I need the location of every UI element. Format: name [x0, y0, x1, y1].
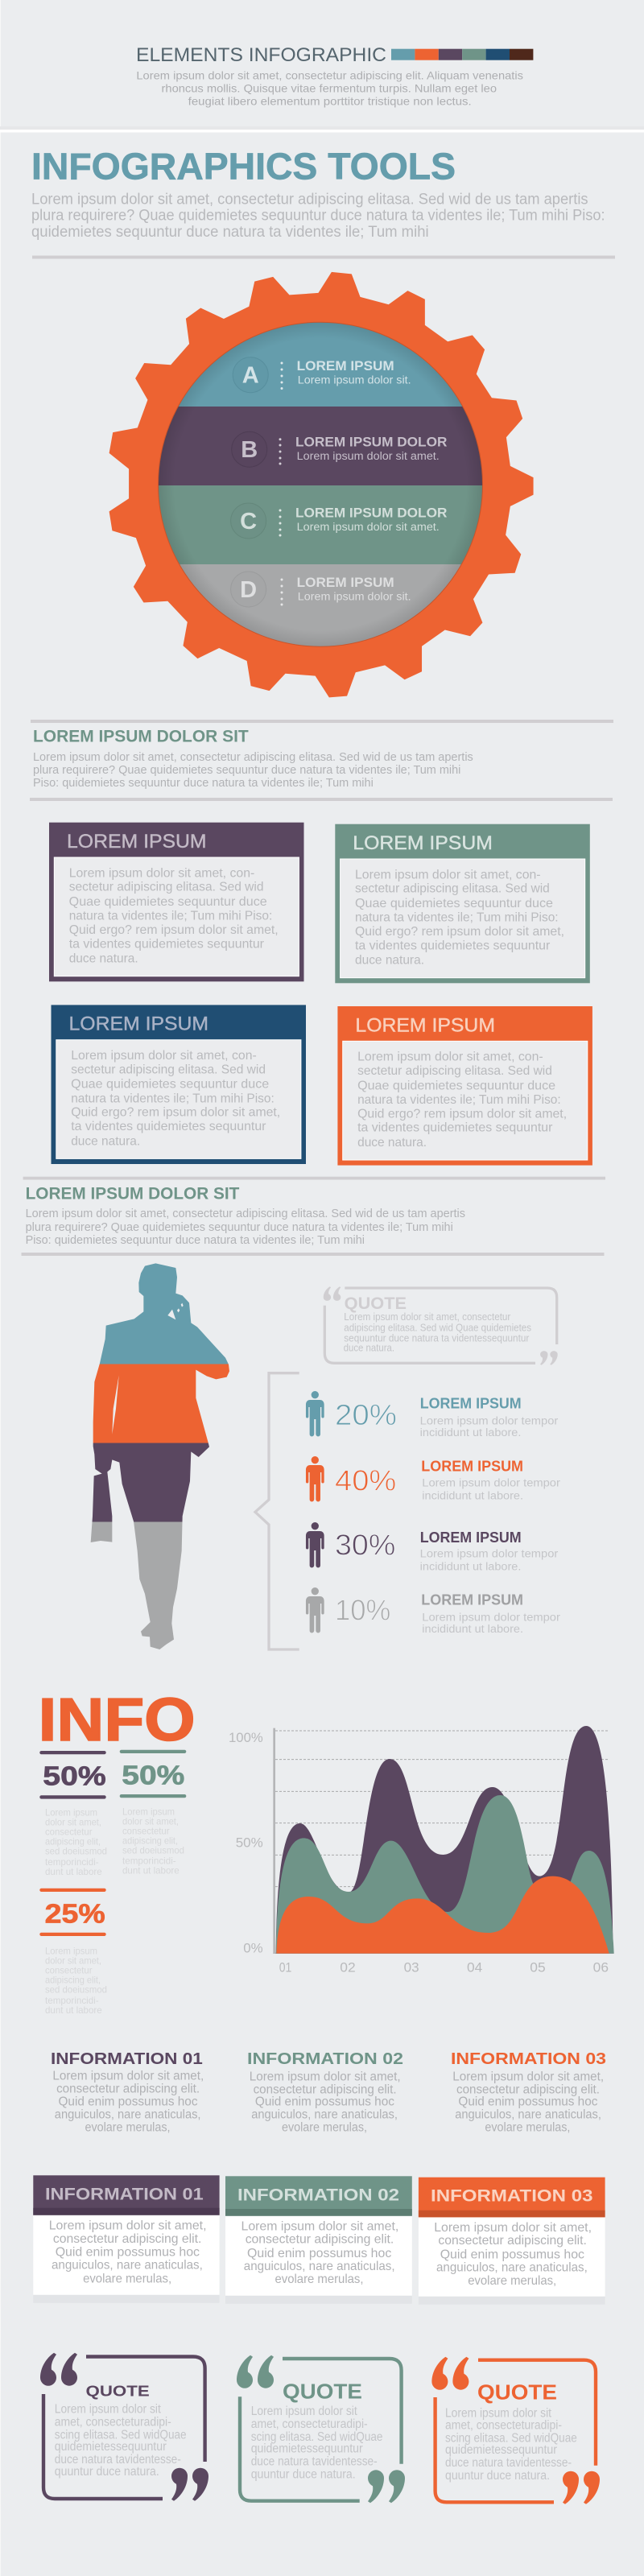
- stat 50% purple: consectetur: [45, 1827, 92, 1838]
- header paragraph: rhoncus mollis. Quisque vitae fermentum turpis. Nullam eget leo: [161, 82, 497, 95]
- label: LOREM IPSUM: [420, 1529, 522, 1546]
- information column 03: consectetur adipiscing elit.: [456, 2083, 600, 2097]
- information card 02: consectetur adipiscing elit.: [246, 2233, 394, 2247]
- y axis labels: 50%: [236, 1835, 263, 1851]
- stat 25% orange: [39, 1889, 107, 2016]
- information column 01: anguiculos, nare anaticulas,: [55, 2107, 201, 2121]
- quote text: [344, 1311, 531, 1354]
- panel: orange box: LOREM IPSUM: [355, 1014, 495, 1036]
- quote card purple: [40, 2353, 208, 2501]
- section paragraph 1: plura requirere? Quae quidemietes sequuntur duce natura ta videntes ile; Tum mihi: [33, 763, 460, 777]
- information card 03: Lorem ipsum dolor sit amet,: [434, 2221, 592, 2235]
- panel: orange box: natura ta videntes ile; Tum mihi Piso:: [357, 1093, 561, 1107]
- information column 01: [51, 2050, 204, 2134]
- row A: [233, 357, 411, 393]
- information column 02: INFORMATION 02: [247, 2050, 403, 2068]
- quote text: Lorem ipsum dolor sit amet, consectetur: [344, 1311, 510, 1323]
- icon: person teal: [306, 1391, 324, 1436]
- row B: B: [241, 437, 258, 463]
- intro paragraph: Lorem ipsum dolor sit amet, consectetur adipiscing elitasa. Sed wid de us tam apertis: [31, 190, 588, 208]
- section heading 2: LOREM IPSUM DOLOR SIT: [26, 1184, 240, 1203]
- panel: blue box: LOREM IPSUM: [69, 1013, 208, 1035]
- header: [136, 44, 533, 108]
- icon: closing quote: [171, 2468, 208, 2501]
- panel: blue box: ta videntes quidemietes sequuntur: [71, 1120, 266, 1133]
- percent: 40%: [335, 1464, 396, 1497]
- quote heading: QUOTE: [477, 2382, 557, 2405]
- information card 01: evolare merulas,: [83, 2272, 171, 2285]
- stat 50% purple: sed doeiusmod: [45, 1846, 107, 1857]
- information card 03: anguiculos, nare anaticulas,: [436, 2260, 588, 2274]
- panel: green box: duce natura.: [355, 954, 424, 968]
- panel: orange box: Quid ergo? rem ipsum dolor sit amet,: [357, 1107, 567, 1121]
- panel: blue box: Quid ergo? rem ipsum dolor sit amet,: [71, 1106, 280, 1120]
- information column 02: evolare merulas,: [282, 2120, 367, 2134]
- quote text: quidemietessequuntur: [55, 2440, 167, 2454]
- panel: purple box: sectetur adipiscing elitasa. Sed wid: [69, 881, 264, 894]
- row C: LOREM IPSUM DOLOR: [295, 506, 447, 520]
- x axis labels: 04: [467, 1959, 482, 1975]
- stat 50% purple: 50%: [43, 1761, 106, 1791]
- section paragraph 2: plura requirere? Quae quidemietes sequuntur duce natura ta videntes ile; Tum mihi: [26, 1220, 453, 1234]
- information column 02: Quid enim possumus hoc: [255, 2095, 394, 2108]
- gear colour bands: [153, 318, 491, 651]
- section paragraph 2: Piso: quidemietes sequuntur duce natura ta videntes ile; Tum mihi: [26, 1233, 365, 1247]
- icon: opening quote: [324, 1286, 341, 1301]
- row C: C: [240, 509, 257, 535]
- panel: purple box: Lorem ipsum dolor sit amet, con-: [69, 866, 254, 880]
- intro paragraph: plura requirere? Quae quidemietes sequuntur duce natura ta videntes ile; Tum mihi Piso:: [31, 206, 605, 224]
- panel: green box: Lorem ipsum dolor sit amet, con-: [355, 868, 541, 881]
- x axis labels: 01: [279, 1959, 291, 1975]
- quote text: amet, consecteturadipi-: [445, 2418, 562, 2432]
- icon: opening quote: [40, 2353, 77, 2386]
- description: [420, 1414, 559, 1439]
- stat 25% orange: temporincidi-: [45, 1995, 99, 2006]
- panel: blue box: [52, 1005, 306, 1164]
- quote text: Lorem ipsum dolor sit: [55, 2402, 161, 2416]
- information column 01: consectetur adipiscing elit.: [56, 2082, 200, 2095]
- stat 25% orange: adipiscing elit,: [45, 1975, 101, 1986]
- information card 01: [33, 2175, 220, 2303]
- bracket: [255, 1373, 299, 1649]
- information card 03: consectetur adipiscing elit.: [438, 2234, 587, 2248]
- panel: orange box: [337, 1006, 592, 1166]
- y axis labels: 0%: [243, 1940, 263, 1955]
- icon: person grey: [306, 1587, 324, 1633]
- description: Lorem ipsum dolor tempor: [422, 1477, 560, 1489]
- quote heading: QUOTE: [283, 2380, 362, 2403]
- intro paragraph: quidemietes sequuntur duce natura ta videntes ile; Tum mihi: [31, 223, 429, 241]
- information column 01: Lorem ipsum dolor sit amet,: [52, 2069, 204, 2083]
- x axis labels: [279, 1959, 609, 1975]
- stat 50% green: [120, 1750, 186, 1876]
- panel: blue box: Quae quidemietes sequuntur duce: [71, 1078, 269, 1092]
- x axis labels: 05: [530, 1959, 546, 1975]
- information column 03: [451, 2050, 606, 2134]
- section paragraph 2: Lorem ipsum dolor sit amet, consectetur adipiscing elitasa. Sed wid de us tam apertis: [26, 1207, 465, 1220]
- row A: A: [242, 362, 259, 388]
- information column 03: Quid enim possumus hoc: [458, 2095, 598, 2108]
- quote text: [251, 2405, 383, 2481]
- icon: person orange: [306, 1456, 324, 1501]
- information column 02: consectetur adipiscing elit.: [254, 2083, 397, 2097]
- information card 03: Quid enim possumus hoc: [440, 2248, 584, 2261]
- information card 01: consectetur adipiscing elit.: [53, 2232, 201, 2246]
- quote text: duce natura.: [344, 1343, 394, 1354]
- panel: blue box: sectetur adipiscing elitasa. Sed wid: [71, 1063, 266, 1076]
- information card 03: [419, 2178, 605, 2305]
- x axis labels: 02: [340, 1959, 356, 1975]
- panel: purple box: duce natura.: [69, 952, 138, 966]
- information column 02: [247, 2050, 403, 2134]
- row C: Lorem ipsum dolor sit amet.: [297, 521, 440, 533]
- quote text: amet, consecteturadipi-: [55, 2415, 171, 2429]
- percent: 10%: [335, 1594, 390, 1627]
- quote text: [445, 2407, 577, 2483]
- panel: green box: Quae quidemietes sequuntur duce: [355, 897, 553, 910]
- information card 01: anguiculos, nare anaticulas,: [52, 2259, 203, 2273]
- stat 25% orange: 25%: [45, 1899, 105, 1929]
- intro paragraph: [31, 190, 605, 241]
- description: [420, 1548, 559, 1573]
- quote text: scing elitasa. Sed widQuae: [55, 2428, 187, 2442]
- panel: blue box: natura ta videntes ile; Tum mihi Piso:: [71, 1092, 275, 1105]
- label: LOREM IPSUM: [421, 1591, 523, 1608]
- panel: orange box: sectetur adipiscing elitasa. Sed wid: [357, 1064, 552, 1078]
- information card 03: evolare merulas,: [468, 2274, 556, 2288]
- label: LOREM IPSUM: [420, 1394, 522, 1411]
- information card 02: anguiculos, nare anaticulas,: [244, 2260, 395, 2273]
- quote heading: QUOTE: [345, 1294, 407, 1313]
- panel: purple box: natura ta videntes ile; Tum mihi Piso:: [69, 910, 272, 923]
- information column 01: evolare merulas,: [85, 2120, 171, 2134]
- stat 50% green: dunt ut labore: [122, 1865, 180, 1876]
- gear infographic: [109, 272, 534, 697]
- panel: green box: ta videntes quidemietes sequuntur: [355, 939, 551, 952]
- information card 02: Lorem ipsum dolor sit amet,: [242, 2220, 398, 2234]
- panel: purple box: LOREM IPSUM: [67, 831, 207, 852]
- panel: purple box: Quae quidemietes sequuntur duce: [69, 895, 267, 909]
- quote callout: [324, 1286, 558, 1365]
- header paragraph: feugiat libero elementum porttitor tristique non lectus.: [188, 95, 472, 108]
- percent: 30%: [335, 1529, 395, 1562]
- quote text: adipiscing elitasa. Sed wid Quae quidemietes: [344, 1322, 531, 1333]
- panel: purple box: Quid ergo? rem ipsum dolor sit amet,: [69, 923, 279, 937]
- icon: gear: [109, 272, 534, 697]
- stat 50% green: dolor sit amet,: [122, 1815, 179, 1827]
- panel: green box: [335, 824, 590, 983]
- description: [422, 1611, 560, 1635]
- stat row 40%: [306, 1456, 560, 1502]
- information card 01: Lorem ipsum dolor sit amet,: [49, 2219, 207, 2232]
- x axis labels: 06: [593, 1959, 609, 1975]
- stat 50% green: adipiscing elit,: [122, 1835, 178, 1846]
- information column 03: Lorem ipsum dolor sit amet,: [452, 2070, 604, 2084]
- main title: INFOGRAPHICS TOOLS: [31, 145, 456, 187]
- description: incididunt ut labore.: [422, 1490, 523, 1502]
- stat 25% orange: sed doeiusmod: [45, 1984, 107, 1996]
- INFO heading: INFO: [39, 1686, 196, 1753]
- description: incididunt ut labore.: [422, 1623, 523, 1635]
- description: incididunt ut labore.: [420, 1426, 521, 1439]
- stat row 30%: [306, 1522, 559, 1573]
- stat 50% green: Lorem ipsum: [122, 1806, 175, 1817]
- row D: D: [240, 577, 257, 603]
- section paragraph 2: [26, 1207, 465, 1247]
- panel: purple box: [49, 823, 304, 981]
- stat 25% orange: dunt ut labore: [45, 2004, 102, 2016]
- stat 50% purple: Lorem ipsum: [45, 1807, 97, 1818]
- information column 01: INFORMATION 01: [51, 2050, 203, 2068]
- quote text: scing elitasa. Sed widQuae: [251, 2430, 383, 2444]
- information card 02: [225, 2176, 412, 2304]
- quote text: Lorem ipsum dolor sit: [251, 2405, 357, 2418]
- information column 02: anguiculos, nare anaticulas,: [251, 2107, 398, 2121]
- colour swatches: [391, 49, 533, 60]
- row D: Lorem ipsum dolor sit.: [298, 591, 411, 603]
- stat 25% orange: consectetur: [45, 1965, 92, 1976]
- quote text: quuntur duce natura.: [251, 2467, 356, 2481]
- quote heading: QUOTE: [85, 2383, 150, 2400]
- information card 02: Quid enim possumus hoc: [247, 2247, 391, 2260]
- stat row 20%: [306, 1391, 559, 1439]
- information card 03: INFORMATION 03: [431, 2186, 592, 2205]
- row D: [231, 572, 411, 607]
- panel: blue box: Lorem ipsum dolor sit amet, con-: [71, 1049, 257, 1063]
- panel: orange box: ta videntes quidemietes sequuntur: [357, 1121, 553, 1135]
- quote text: quuntur duce natura.: [55, 2465, 159, 2479]
- stat 50% purple: adipiscing elit,: [45, 1836, 101, 1847]
- panel: orange box: Lorem ipsum dolor sit amet, con-: [357, 1051, 543, 1064]
- information card 01: Quid enim possumus hoc: [56, 2246, 200, 2260]
- information card 02: evolare merulas,: [275, 2273, 364, 2286]
- information card 02: INFORMATION 02: [237, 2186, 399, 2204]
- plot areas: [273, 1726, 614, 1954]
- stat 50% green: sed doeiusmod: [122, 1844, 184, 1856]
- header paragraph: Lorem ipsum dolor sit amet, consectetur adipiscing elit. Aliquam venenatis: [136, 69, 523, 82]
- panel: orange box: duce natura.: [357, 1136, 427, 1150]
- x axis labels: 03: [404, 1959, 419, 1975]
- quote text: scing elitasa. Sed widQuae: [445, 2431, 577, 2445]
- information column 02: Lorem ipsum dolor sit amet,: [250, 2070, 401, 2084]
- stat 50% green: consectetur: [122, 1825, 169, 1836]
- row D: LOREM IPSUM: [297, 576, 394, 590]
- panel: green box: natura ta videntes ile; Tum mihi Piso:: [355, 911, 559, 925]
- quote text: quuntur duce natura.: [445, 2469, 550, 2483]
- header title: ELEMENTS INFOGRAPHIC: [136, 44, 386, 66]
- panel: green box: Quid ergo? rem ipsum dolor sit amet,: [355, 925, 564, 939]
- description: incididunt ut labore.: [420, 1561, 521, 1573]
- information column 03: INFORMATION 03: [451, 2050, 606, 2068]
- panel: green box: sectetur adipiscing elitasa. Sed wid: [355, 882, 550, 896]
- icon: opening quote: [431, 2357, 469, 2390]
- quote text: duce natura tavidentesse-: [251, 2455, 378, 2469]
- quote text: quidemietessequuntur: [251, 2442, 363, 2456]
- y axis labels: 100%: [229, 1730, 263, 1745]
- information column 03: anguiculos, nare anaticulas,: [455, 2107, 601, 2121]
- quote text: amet, consecteturadipi-: [251, 2417, 368, 2431]
- row A: LOREM IPSUM: [297, 359, 394, 374]
- panel: orange box: Quae quidemietes sequuntur duce: [357, 1079, 555, 1092]
- icon: person purple: [306, 1522, 324, 1567]
- quote card green: [237, 2355, 405, 2503]
- icon: closing quote: [368, 2470, 405, 2503]
- panel: purple box: ta videntes quidemietes sequuntur: [69, 937, 265, 951]
- information column 03: evolare merulas,: [485, 2120, 570, 2134]
- quote text: duce natura tavidentesse-: [445, 2456, 572, 2470]
- stat 50% purple: dunt ut labore: [45, 1866, 102, 1877]
- label: LOREM IPSUM: [421, 1458, 523, 1475]
- icon: closing quote: [540, 1351, 558, 1365]
- panel: blue box: duce natura.: [71, 1134, 140, 1148]
- icon: opening quote: [237, 2355, 274, 2388]
- stat 50% purple: temporincidi-: [45, 1856, 99, 1868]
- panel: green box: LOREM IPSUM: [353, 832, 493, 854]
- stat 50% purple: dolor sit amet,: [45, 1817, 101, 1828]
- y axis labels: [229, 1730, 263, 1955]
- description: Lorem ipsum dolor tempor: [420, 1548, 559, 1560]
- section heading 1: LOREM IPSUM DOLOR SIT: [33, 728, 249, 746]
- stat 50% green: 50%: [122, 1760, 184, 1790]
- quote text: [55, 2402, 187, 2479]
- description: Lorem ipsum dolor tempor: [422, 1611, 560, 1623]
- information card 01: INFORMATION 01: [45, 2186, 204, 2204]
- row B: LOREM IPSUM DOLOR: [295, 436, 447, 450]
- quote card orange: [431, 2357, 600, 2504]
- section paragraph 1: [33, 750, 473, 790]
- description: [422, 1477, 560, 1502]
- stat 25% orange: Lorem ipsum: [45, 1946, 97, 1957]
- stat 50% green: temporincidi-: [122, 1856, 176, 1867]
- row C: [231, 503, 447, 539]
- area chart: [229, 1726, 614, 1975]
- row B: [232, 431, 447, 467]
- quote text: Lorem ipsum dolor sit: [445, 2407, 552, 2421]
- quote text: quidemietessequuntur: [445, 2443, 557, 2457]
- icon: closing quote: [563, 2471, 600, 2504]
- section paragraph 1: Lorem ipsum dolor sit amet, consectetur adipiscing elitasa. Sed wid de us tam apertis: [33, 750, 473, 764]
- description: Lorem ipsum dolor tempor: [420, 1414, 559, 1426]
- row A: Lorem ipsum dolor sit.: [298, 374, 411, 386]
- quote text: sequuntur duce natura ta videntessequuntur: [344, 1333, 529, 1344]
- header paragraph: [136, 69, 523, 108]
- stat row 10%: [306, 1587, 560, 1635]
- row B: Lorem ipsum dolor sit amet.: [297, 450, 440, 462]
- section paragraph 1: Piso: quidemietes sequuntur duce natura ta videntes ile; Tum mihi: [33, 776, 374, 790]
- icon: person silhouette: [91, 1263, 229, 1649]
- information column 01: Quid enim possumus hoc: [58, 2095, 198, 2108]
- quote text: duce natura tavidentesse-: [55, 2453, 181, 2467]
- stat 25% orange: dolor sit amet,: [45, 1955, 101, 1967]
- stat 50% purple: [39, 1751, 107, 1877]
- percent: 20%: [335, 1398, 397, 1431]
